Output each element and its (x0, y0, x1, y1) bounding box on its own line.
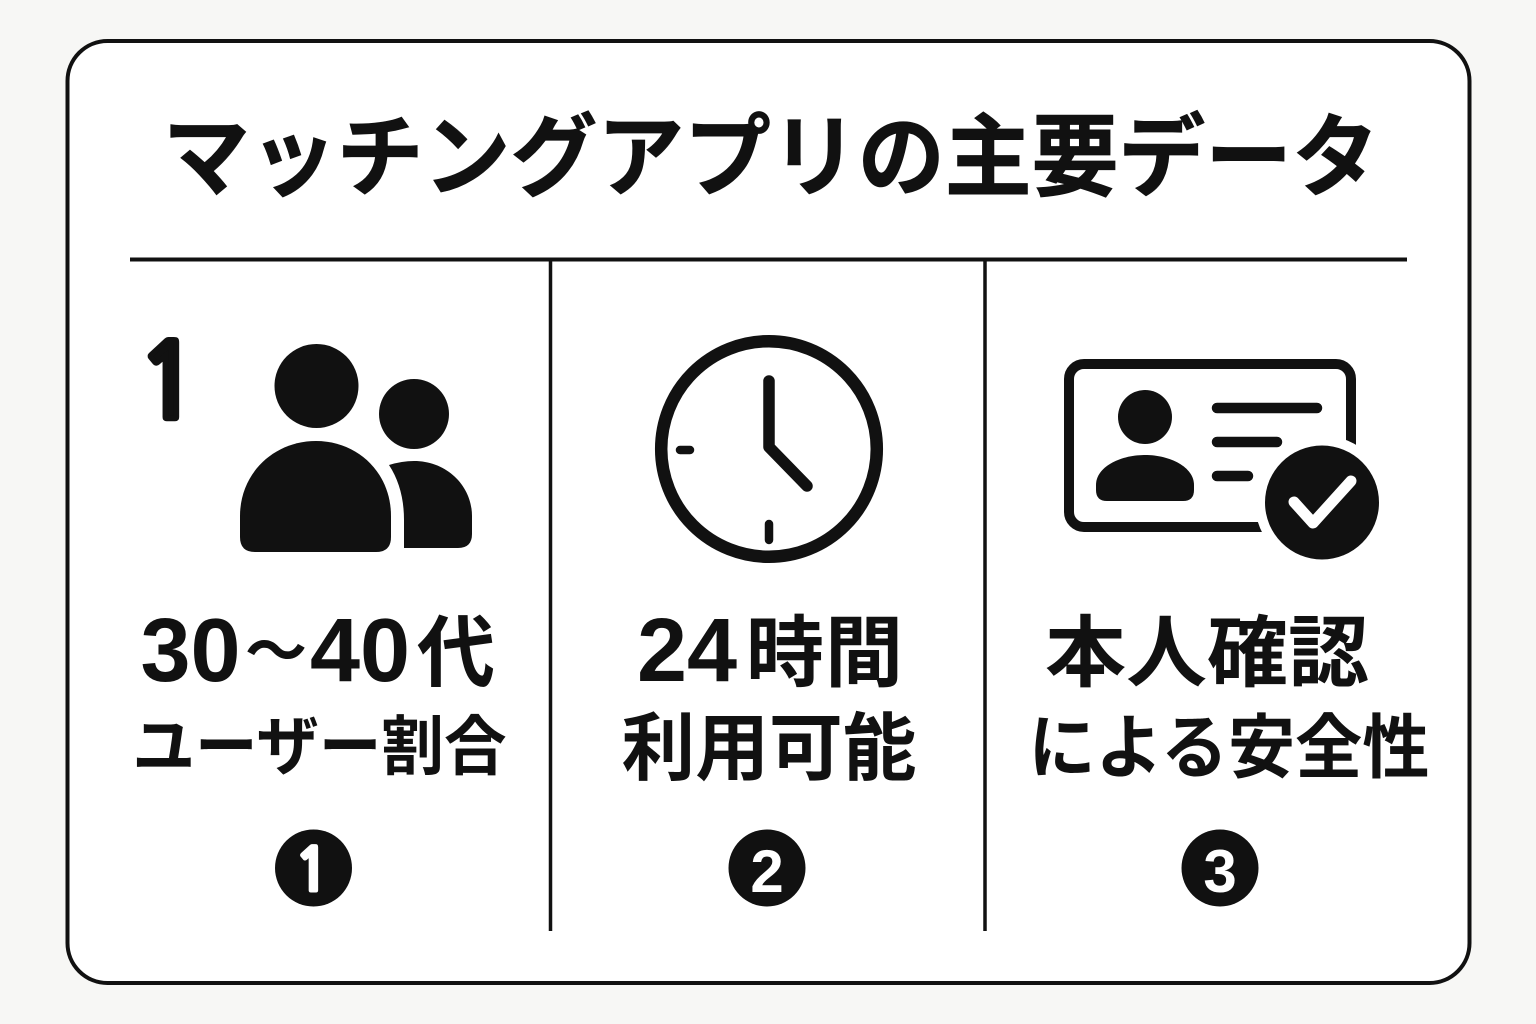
panel: column 3 (1028, 364, 1430, 906)
stat heading: 間 (825, 591, 903, 703)
stat label: ユーザー割合 (132, 694, 506, 788)
panel: column 2 (622, 341, 916, 906)
icon: clock (661, 341, 877, 557)
stat heading: 〜 (245, 601, 307, 691)
stat label: 利用可能 (622, 689, 916, 796)
panel: column 1 (132, 332, 506, 906)
badge 1: 1 (294, 841, 330, 900)
icon: id card (1069, 364, 1389, 570)
badge 1 (275, 830, 352, 906)
stat heading: 時 (746, 591, 824, 703)
badge 3: 3 (1203, 838, 1237, 905)
stat heading: 本人確認 (1045, 591, 1369, 703)
stat heading: 40 (310, 601, 410, 701)
title: マッチングアプリの主要データ (163, 84, 1379, 214)
icon: users (240, 344, 472, 552)
stat heading: 代 (417, 591, 495, 703)
stat heading: 24 (637, 601, 737, 701)
stat label: による安全性 (1028, 692, 1430, 793)
badge 3 (1182, 830, 1258, 906)
badge 2: 2 (750, 838, 784, 905)
number 1: 1 (137, 332, 200, 434)
stat heading: 30 (140, 601, 241, 701)
badge 2 (728, 830, 806, 906)
